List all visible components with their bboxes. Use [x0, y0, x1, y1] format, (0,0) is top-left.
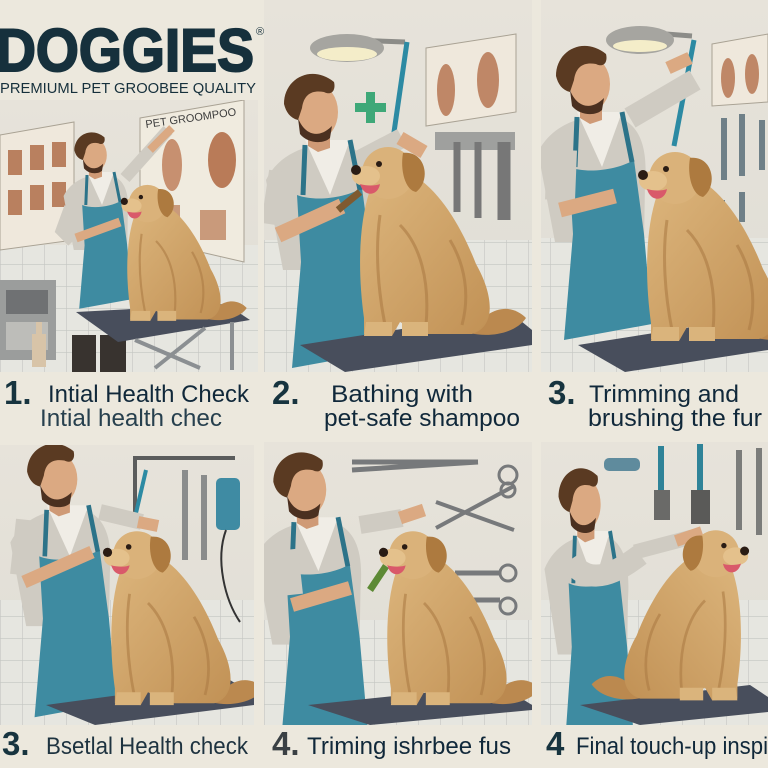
- shears and scissors: [352, 462, 517, 614]
- anatomy poster, right: [140, 100, 244, 262]
- groomer figure: [544, 468, 702, 748]
- dog, facing right: [592, 530, 749, 700]
- poster: [712, 34, 768, 106]
- caption 1: Intial health chec: [40, 405, 222, 432]
- poster: [426, 34, 516, 126]
- drying stand and tools: [135, 458, 240, 622]
- grooming table: [46, 680, 254, 725]
- number 3: 3.: [548, 374, 576, 411]
- wall tools: [722, 114, 762, 222]
- title: DOGGIES: [0, 17, 254, 84]
- panel 6: final touch-up: [541, 442, 768, 748]
- groomer figure: [256, 452, 424, 741]
- caption row 2: [2, 725, 768, 762]
- groomer figure: [538, 46, 695, 340]
- shampoo bottle: [32, 322, 46, 367]
- groomer figure: [64, 128, 172, 372]
- anatomy poster, left: [0, 122, 74, 250]
- leash: [134, 470, 148, 513]
- panel 1: initial health check: [0, 100, 258, 372]
- groomer figure: [266, 74, 424, 368]
- caption 3: brushing the fur: [588, 405, 762, 432]
- grooming table: [300, 322, 532, 372]
- panel 2: bathing: [264, 0, 532, 372]
- caption 3: [588, 381, 762, 432]
- groomer figure: [10, 444, 158, 717]
- caption row 1: [4, 374, 762, 432]
- number 4: 4.: [272, 725, 300, 762]
- dog: [638, 152, 768, 341]
- dog: [103, 531, 264, 705]
- grooming table: [578, 328, 768, 372]
- registered mark: ®: [256, 26, 264, 38]
- number 4: 4: [546, 725, 565, 762]
- caption 3: Trimming and: [589, 381, 739, 408]
- ceiling lamp: [606, 26, 692, 54]
- caption 2: pet-safe shampoo: [324, 405, 520, 432]
- number 2: 2.: [272, 374, 300, 411]
- green cross: [355, 92, 386, 123]
- wall tools: [604, 444, 759, 535]
- ceiling lamp: [310, 34, 405, 62]
- anatomy poster, right: PET GROOMPOO: [145, 106, 237, 131]
- caption 2: Bathing with: [331, 381, 473, 408]
- caption 1: Intial Health Check: [48, 381, 250, 408]
- panel 4: health check: [0, 444, 264, 725]
- caption 1: [40, 381, 250, 432]
- grooming cart: [0, 280, 56, 360]
- dog: [379, 531, 540, 705]
- leash: [674, 40, 694, 146]
- panel 3: trimming: [538, 0, 768, 372]
- number 3: 3.: [2, 725, 30, 762]
- caption 5: Triming ishrbee fus: [307, 733, 511, 760]
- dog: [121, 185, 247, 321]
- grooming table: [76, 304, 250, 370]
- dog: [351, 147, 526, 336]
- leash: [392, 42, 407, 146]
- tool rack: [435, 132, 515, 220]
- tagline: PREMIUML PET GROOBEE QUALITY: [0, 80, 256, 97]
- caption 4: Bsetlal Health check: [46, 733, 249, 760]
- panel 5: trimming: [264, 452, 532, 725]
- grooming table: [308, 692, 532, 725]
- brand header: [0, 0, 264, 100]
- caption 2: [324, 381, 520, 432]
- grooming table: [580, 685, 768, 725]
- number 1: 1.: [4, 374, 32, 411]
